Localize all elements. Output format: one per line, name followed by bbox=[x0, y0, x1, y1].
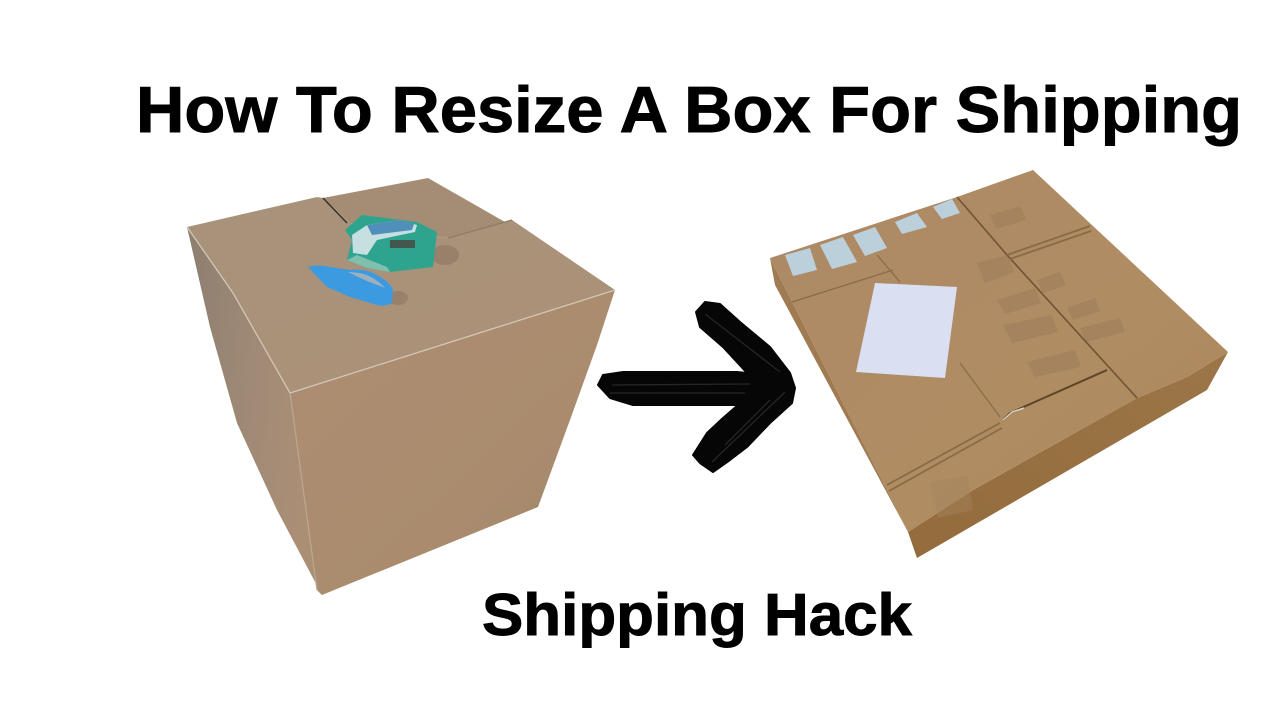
icon: blue box cutter bbox=[308, 266, 408, 306]
left face of box bbox=[187, 227, 322, 595]
darker tape patches bbox=[930, 206, 1125, 518]
white shipping label bbox=[856, 283, 957, 378]
top face of flattened box bbox=[770, 170, 1228, 532]
subtitle: Shipping Hack bbox=[482, 582, 912, 648]
side face of flattened box bbox=[908, 352, 1228, 558]
flap seams bbox=[957, 197, 1137, 398]
top flaps of box bbox=[187, 197, 615, 393]
right photo: resized flattened box bbox=[770, 170, 1228, 558]
labels on top edge of box bbox=[785, 199, 960, 276]
back flap of box bbox=[323, 178, 505, 238]
right face of box bbox=[290, 290, 615, 595]
title: How To Resize A Box For Shipping bbox=[136, 73, 1242, 146]
left photo: full-size cardboard box bbox=[187, 178, 615, 595]
arrow: black brush stroke pointing right bbox=[598, 302, 795, 472]
side edge of flattened box bbox=[770, 258, 908, 532]
icon: green tape dispenser bbox=[345, 215, 459, 272]
